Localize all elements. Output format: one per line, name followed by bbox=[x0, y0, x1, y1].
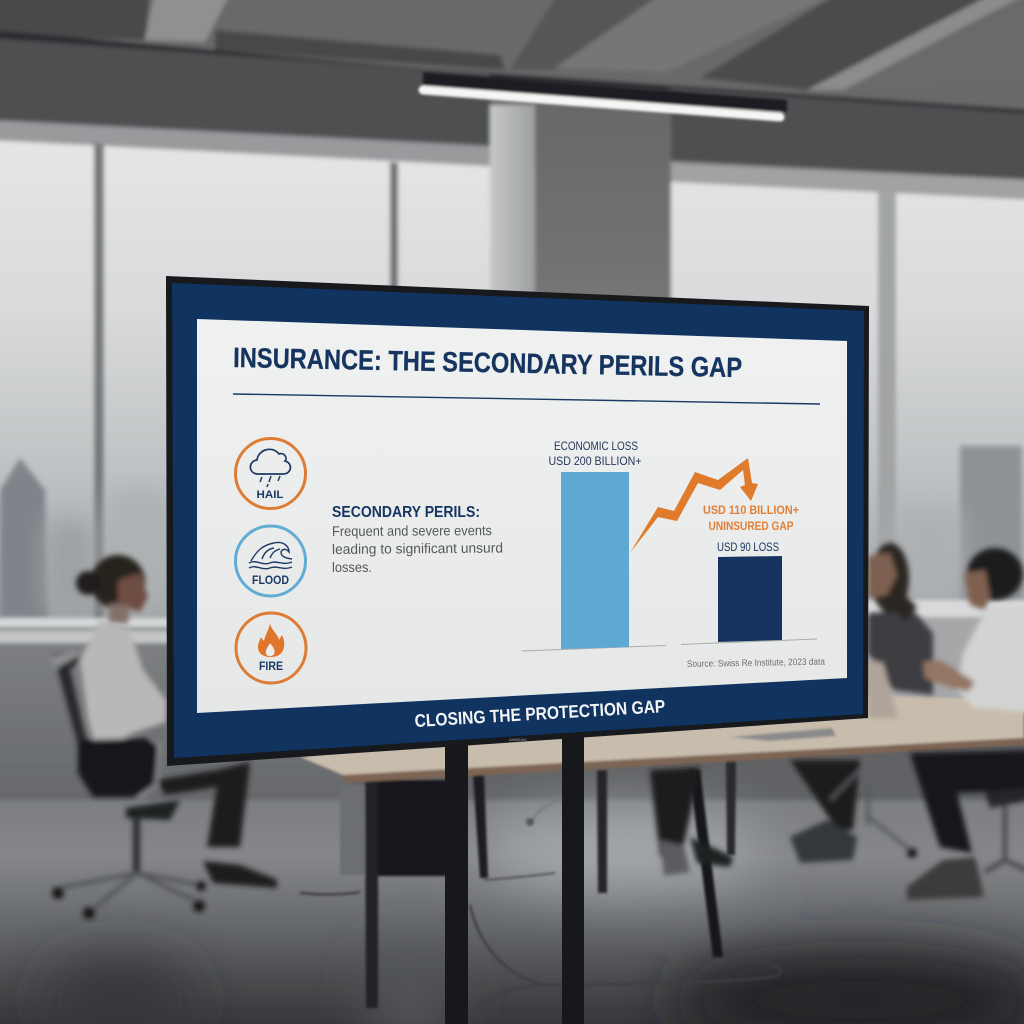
bar: economic loss bbox=[561, 472, 629, 649]
label: economic loss: ECONOMIC LOSS bbox=[554, 439, 638, 453]
floor reflections bbox=[50, 810, 1024, 1024]
white slide panel bbox=[197, 319, 847, 713]
navy slide frame bbox=[172, 283, 864, 758]
icon: flood bbox=[236, 526, 306, 596]
icon: fire bbox=[236, 613, 306, 683]
center column bbox=[490, 105, 536, 645]
city skyline bbox=[0, 446, 1022, 618]
torso bbox=[80, 620, 166, 753]
ceiling dark line bbox=[0, 30, 1024, 116]
right window bbox=[670, 180, 1024, 620]
woman in dark jacket bbox=[868, 610, 933, 695]
blurred table and table legs bbox=[300, 695, 1024, 1008]
monitor bezel bbox=[166, 276, 869, 766]
person in white shirt bbox=[957, 607, 1024, 713]
title: INSURANCE: THE SECONDARY PERILS GAP bbox=[233, 342, 742, 383]
people on right at table bbox=[650, 543, 1024, 900]
monitor stand poles bbox=[445, 735, 584, 1024]
footer banner text: CLOSING THE PROTECTION GAP bbox=[414, 696, 666, 731]
text block: secondary perils: Frequent and severe events bbox=[332, 522, 492, 539]
label: usd 90 loss: USD 90 LOSS bbox=[717, 540, 779, 554]
seat and legs bbox=[78, 738, 157, 797]
ceiling light fixture bbox=[423, 72, 787, 117]
arrow: zigzag gap bbox=[630, 458, 758, 553]
source note: Source: Swiss Re Institute, 2023 data bbox=[687, 657, 826, 670]
chair bbox=[52, 650, 86, 745]
text block: secondary perils: leading to significant unsurd bbox=[332, 540, 503, 557]
table leg: diagonal bbox=[689, 770, 723, 957]
middle legs bbox=[650, 767, 700, 857]
head bbox=[91, 555, 145, 609]
title divider bbox=[233, 394, 820, 404]
label: usd 200 billion: USD 200 BILLION+ bbox=[548, 454, 642, 468]
baselines bbox=[522, 646, 666, 651]
text block: secondary perils: losses. bbox=[332, 559, 372, 575]
label: uninsured gap: USD 110 BILLION+ bbox=[703, 503, 799, 517]
bar chart: UNINSURED GAP bbox=[708, 519, 794, 533]
monitor bbox=[166, 276, 869, 766]
sill and wall bbox=[0, 618, 170, 627]
icon: hail: HAIL bbox=[256, 489, 284, 501]
bar chart bbox=[522, 439, 817, 651]
laptop bbox=[868, 660, 898, 718]
bar: insured loss bbox=[718, 556, 782, 642]
icon: hail bbox=[236, 438, 306, 508]
floor bbox=[0, 800, 1024, 1024]
ceiling bbox=[0, 0, 1024, 120]
person on left in chair bbox=[50, 555, 277, 919]
middle chair wheel bbox=[526, 818, 534, 826]
text block: secondary perils: SECONDARY PERILS: bbox=[332, 504, 480, 521]
upper wall band bbox=[0, 38, 490, 150]
text block: secondary perils bbox=[332, 504, 503, 575]
cable on floor bbox=[300, 798, 781, 1013]
left window bbox=[0, 140, 490, 630]
icon: fire: FIRE bbox=[259, 661, 283, 673]
icon: flood: FLOOD bbox=[252, 575, 289, 587]
brand mark: SAMSUNG bbox=[509, 738, 527, 742]
